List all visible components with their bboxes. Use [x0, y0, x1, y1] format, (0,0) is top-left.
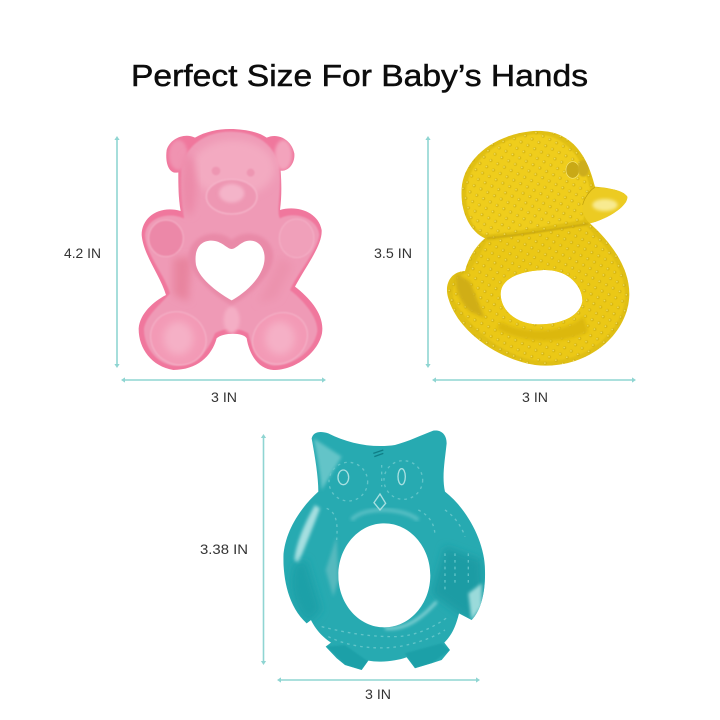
dimension: bear width arrow — [121, 377, 326, 383]
label: duck height: 3.5 IN — [374, 246, 412, 261]
dimension: owl width arrow — [277, 677, 480, 683]
dimension: bear height arrow — [114, 136, 120, 368]
heart hole — [196, 241, 265, 300]
title: Perfect Size For Baby’s Hands — [131, 58, 588, 93]
icon: duck teether — [446, 130, 630, 366]
icon: owl teether — [283, 430, 486, 670]
dimension: duck height arrow — [425, 136, 431, 368]
label: duck width: 3 IN — [522, 390, 548, 405]
dimension: owl height arrow — [261, 434, 266, 665]
icon: bear teether — [138, 129, 322, 370]
panel: duck teether — [446, 130, 630, 366]
panel: bear teether — [138, 129, 322, 370]
label: owl height: 3.38 IN — [200, 542, 248, 557]
dimension: duck width arrow — [432, 377, 636, 383]
label: bear height: 4.2 IN — [64, 246, 101, 261]
label: owl width: 3 IN — [365, 687, 391, 702]
panel: owl teether — [283, 430, 486, 670]
label: bear width: 3 IN — [211, 390, 237, 405]
